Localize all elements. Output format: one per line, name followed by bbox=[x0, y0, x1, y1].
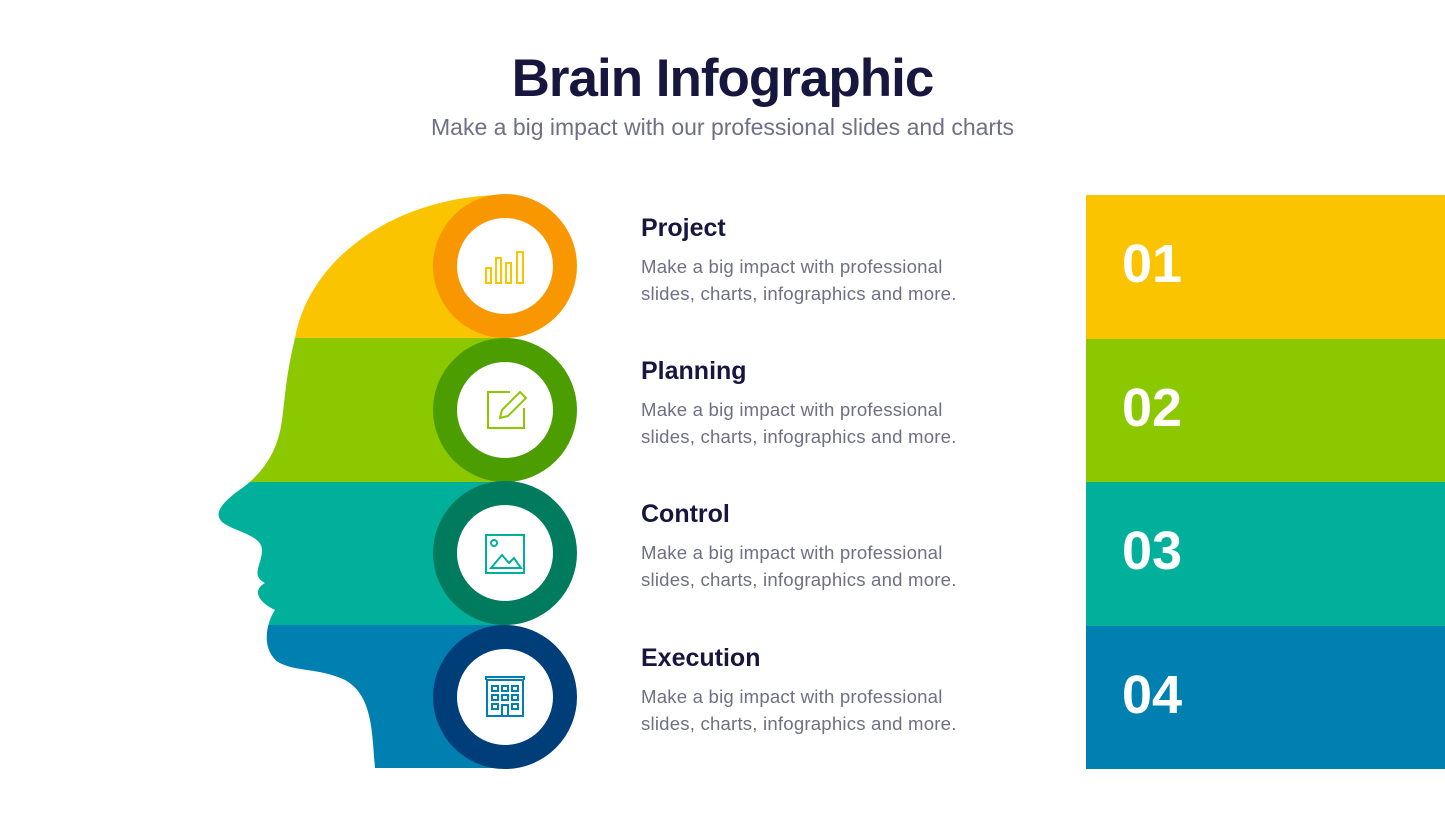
item: Control: Control bbox=[641, 500, 730, 528]
bar 04: 04 bbox=[1122, 665, 1182, 725]
item: Execution: slides, charts, infographics and more. bbox=[641, 713, 957, 734]
item: Planning: Make a big impact with professional bbox=[641, 399, 943, 420]
item: Project: slides, charts, infographics and more. bbox=[641, 283, 957, 304]
bar 01: 01 bbox=[1122, 234, 1182, 294]
head graphic bbox=[218, 194, 577, 769]
bar 02: 02 bbox=[1122, 378, 1182, 438]
circle 1: chart icon bbox=[445, 206, 565, 326]
item: Execution: Make a big impact with professional bbox=[641, 686, 943, 707]
bar 03: 03 bbox=[1122, 521, 1182, 581]
item: Execution bbox=[641, 644, 957, 734]
bar 03 bbox=[1086, 482, 1445, 626]
circle 2: edit icon bbox=[445, 350, 565, 470]
circle 3: image icon bbox=[445, 493, 565, 613]
title: Brain Infographic bbox=[512, 49, 933, 108]
item: Project bbox=[641, 214, 957, 304]
item: Control bbox=[641, 500, 957, 590]
item: Execution: Execution bbox=[641, 644, 760, 672]
item: Control: Make a big impact with professional bbox=[641, 542, 943, 563]
bar 04 bbox=[1086, 626, 1445, 769]
item: Project: Project bbox=[641, 214, 726, 242]
item: Planning bbox=[641, 357, 957, 447]
bar 01 bbox=[1086, 195, 1445, 339]
subtitle: Make a big impact with our professional slides and charts bbox=[431, 114, 1014, 140]
bar 02 bbox=[1086, 339, 1445, 483]
item: Planning: Planning bbox=[641, 357, 747, 385]
item: Control: slides, charts, infographics and more. bbox=[641, 569, 957, 590]
item: Project: Make a big impact with professional bbox=[641, 256, 943, 277]
circle 4: building icon bbox=[445, 637, 565, 757]
item: Planning: slides, charts, infographics and more. bbox=[641, 426, 957, 447]
